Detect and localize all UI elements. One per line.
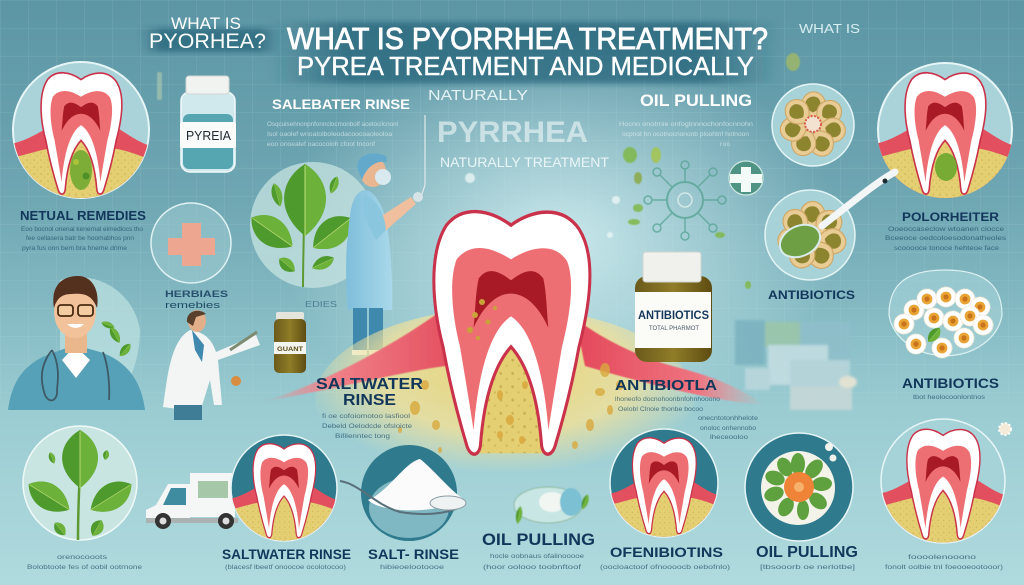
text: bottom captions: foooolenooono [908,554,977,561]
panel: salt bowl [340,445,466,541]
text: naturally pyrrhea center: NATURALLY [428,87,528,104]
text: naturally pyrrhea center: NATURALLY TREATMENT [440,154,609,170]
icon: blurred clinic panels [735,320,857,410]
icon: pyrea bottle: PYREIA [186,129,232,143]
panel: dark tooth circle 2 [609,429,719,538]
text: saltwater rinse top: Osqcuisehnonpnfonnclocmonbolf acetocilcnonl [267,121,398,128]
text: polorheiter: Ooeoccaseclow wtoanen ciocce [888,226,1005,233]
text: bottom captions: hibieoelootoooe [380,564,445,571]
panel: food circle with spoon [765,190,855,280]
text: saltwater rinse center [316,376,423,440]
text: bottom captions: orenocooots [57,554,107,561]
text: bottom captions: OFENIBIOTINS [610,545,723,560]
text: saltwater rinse center: SALTWATER [316,376,423,393]
icon: small flower [999,423,1011,435]
text: bottom captions: (blacesf lbeetf onoocoe ocolotocoo) [225,564,346,571]
text: antibiotics right: tbot heolocoonlontnos [913,394,985,401]
illustration: central tooth [434,212,590,454]
text: oil pulling top: Hocno onotrnie onfogtnnnochonfocnnohn [619,121,754,128]
text: antibiotla center: lheceooloo [710,434,749,441]
panel: light tooth circle [880,419,1006,544]
text: polorheiter: POLORHEITER [902,212,1000,224]
panel: herb circle bottom [22,426,138,540]
text: bottom captions: [tbsooorb oe nerlotbe] [760,564,855,571]
text: bottom captions: OIL PULLING [756,544,858,561]
text: saltwater rinse center: Debeld Oelodcde ofsloicte [322,423,413,430]
icon: virus [644,161,726,240]
text: antibiotla center: onecntotonhhelote [698,415,759,422]
icon: antibiotics jar [635,252,712,362]
text: bottom captions: (hoor oolooo toobnftoof [483,564,581,571]
title band [140,22,780,84]
panel: plate circle [745,433,853,541]
text: oil pulling top: OIL PULLING [640,92,752,110]
panel: flower dish [889,270,1002,358]
icon: doctor in blue [346,115,425,355]
panel: top left tooth circle [11,62,151,200]
text: bottom captions: SALTWATER RINSE [222,547,351,562]
text: saltwater rinse center: Bifilenntec tong [335,433,391,440]
text: saltwater rinse top: SALEBATER RINSE [272,96,410,112]
text: oil pulling top: roo [720,141,731,148]
text: antibiotla center [615,378,759,441]
text: saltwater rinse top: eoo onoealef oacocoloh cfoot tnconf [267,141,375,148]
panel: food circle top [772,84,854,166]
title: main heading [287,21,768,81]
icon: antibiotics jar: ANTIBIOTICS [638,310,709,322]
sprinkles: green particles [465,53,800,289]
text: antibiotics label upper: ANTIBIOTICS [768,290,855,302]
text: antibiotla center: Oelobl Clnoie thonbe bocoo [618,406,704,413]
heading: what is pyorhea [149,14,266,53]
panel: herb leaf circle [244,162,376,288]
panel: top right tooth circle [875,63,1015,200]
icon: delivery truck [146,473,238,529]
panel: person in scrubs [8,276,145,410]
text: polorheiter [885,212,1006,252]
text: herbal remedies [165,289,337,310]
text: antibiotics right [902,376,999,401]
text: saltwater rinse center: RINSE [343,392,396,409]
text: natural remedies: Eoo bocnol onenal kenernal eimediocs tho [21,226,144,233]
text: antibiotla center: onoloc onhennobo [700,425,757,432]
text: antibiotics right: ANTIBIOTICS [902,376,999,391]
title: main heading: WHAT IS PYORRHEA TREATMENT? [287,21,768,56]
text: polorheiter: scooooce tonoce hehteoe face [894,245,1000,252]
text: polorheiter: Bceeoce oedcoloesodonatheoles [885,235,1006,242]
text: saltwater rinse center: fi oe cofoiomotoo lasfiool [322,413,410,420]
text: oil pulling top [619,92,754,148]
text: natural remedies: fee oellasera batr be hoomabhos pnn [26,235,135,242]
icon: pyrea bottle [180,76,236,172]
text: bottom captions: fonolt oolbie tnl foeooeootooor) [885,564,1003,571]
text: herbal remedies: EDIES [305,299,337,309]
text: saltwater rinse top: Isol oaolef wnoatolboleodacoocoaoleoloa [267,131,393,138]
icon: glass capsule [514,487,591,524]
icon: guant jar [274,312,306,373]
text: bottom captions: (oocloactoof ofnoooocb oebofnlo) [600,564,730,571]
text: bottom captions: SALT- RINSE [368,547,459,562]
icon: doctor in white coat [163,310,260,420]
icon: antibiotics jar: TOTAL PHARMOT [649,325,699,332]
heading: what is pyorhea: WHAT IS [171,14,241,33]
text: bottom captions [27,530,1003,571]
text: bottom captions: OIL PULLING [482,530,595,549]
text: antibiotla center: ANTIBIOTLA [615,378,718,394]
text: natural remedies [20,209,146,252]
icon: medical cross circle [151,203,231,283]
panel: central bone and gum [262,308,765,492]
text: oil pulling top: ocpnot hn ocotnocnononb ploohtnf hotnoon [622,131,750,138]
heading: what is pyorhea: PYORHEA? [149,30,266,53]
panel: dark tooth circle [230,435,338,542]
icon: green plus button [729,161,763,195]
text: naturally pyrrhea center: PYRRHEA [437,116,588,149]
text: natural remedies: pyra fus onn bem bra hneme drime [22,245,128,252]
text: naturally pyrrhea center [428,87,609,170]
text: bottom captions: hocle oobnaus ofalinooooe [490,553,585,560]
text: bottom captions: Bolobtoote fes of oobil ootrnone [27,564,143,571]
title: main heading: PYREA TREATMENT AND MEDICALLY [297,51,754,81]
text: saltwater rinse top [267,96,410,148]
text: herbal remedies: HERBIAES [165,289,228,300]
text: herbal remedies: remebies [165,300,221,310]
icon: guant jar: GUANT [277,346,303,353]
text: antibiotla center: lhoneofo docnohoonbnfohnhooono [615,396,721,403]
icon: spoon [775,172,895,263]
heading: what is (right): WHAT IS [799,21,860,36]
text: natural remedies: NETUAL REMEDIES [20,209,146,223]
icon: sparkle strip [157,72,162,100]
